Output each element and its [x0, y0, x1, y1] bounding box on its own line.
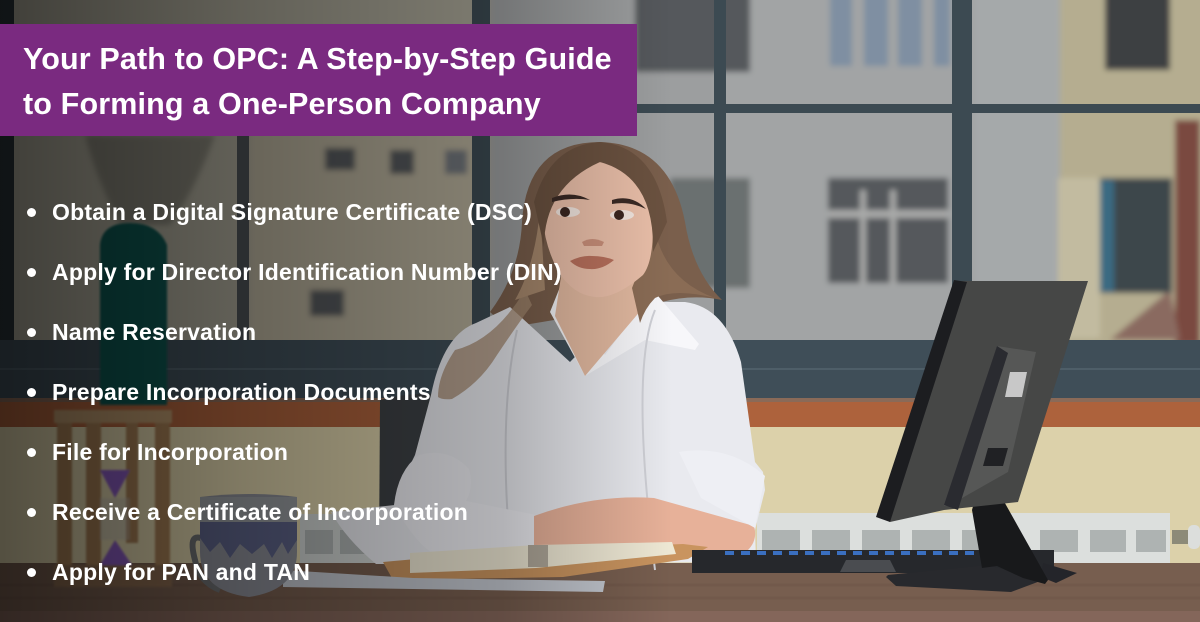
- hourglass: [54, 410, 172, 587]
- step 4: Prepare Incorporation Documents: [52, 379, 431, 405]
- step 3: Name Reservation: [52, 319, 256, 345]
- window sill band: [0, 340, 1200, 427]
- step 6: Receive a Certificate of Incorporation: [52, 499, 468, 525]
- open notebook: [383, 542, 708, 580]
- hair strand: [438, 290, 532, 399]
- papers: [283, 570, 605, 592]
- title banner: [0, 24, 637, 136]
- face: [543, 162, 653, 297]
- shirt: [331, 300, 765, 564]
- eyebrows: [552, 194, 646, 209]
- title: Your Path to OPC: A Step-by-Step Guide: [23, 42, 612, 76]
- step 2: Apply for Director Identification Number (DIN): [52, 259, 562, 285]
- neck: [555, 270, 648, 376]
- hair back: [490, 142, 722, 327]
- monitor with stand: [876, 280, 1088, 592]
- wall: [0, 427, 1200, 564]
- title: to Forming a One-Person Company: [23, 87, 541, 121]
- desk: [0, 563, 1200, 622]
- step 5: File for Incorporation: [52, 439, 288, 465]
- keyboard: [692, 550, 1054, 573]
- window view: blurred buildings: [0, 0, 1200, 350]
- rolled sleeve left and forearm: [394, 453, 536, 555]
- chair: [379, 394, 436, 555]
- step 1: Obtain a Digital Signature Certificate (DSC): [52, 199, 532, 225]
- nose and lips: [570, 239, 614, 269]
- title: [23, 42, 612, 121]
- coffee mug: [193, 494, 297, 597]
- eyes: [556, 207, 634, 220]
- plant and vase: [85, 135, 215, 405]
- radiator: [300, 513, 1200, 564]
- window frames: [0, 0, 1200, 345]
- step 7: Apply for PAN and TAN: [52, 559, 310, 585]
